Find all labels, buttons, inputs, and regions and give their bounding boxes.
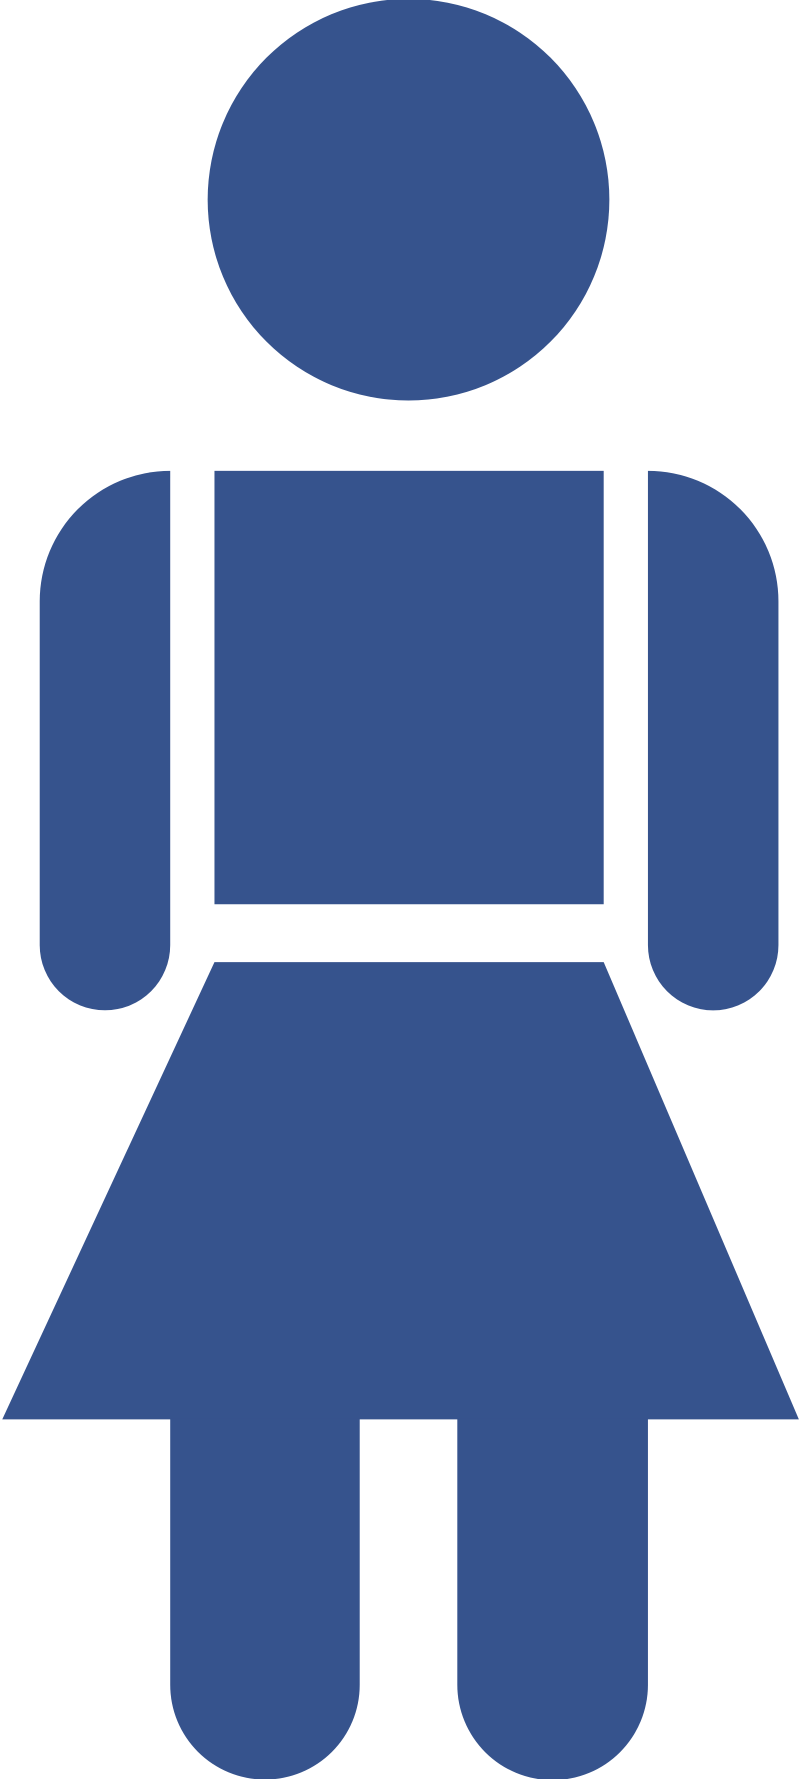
left arm	[40, 471, 170, 1010]
skirt	[2, 962, 799, 1419]
left leg	[170, 1418, 360, 1779]
head	[208, 0, 609, 401]
right leg	[457, 1418, 648, 1779]
right arm	[648, 471, 778, 1010]
torso	[214, 471, 604, 904]
